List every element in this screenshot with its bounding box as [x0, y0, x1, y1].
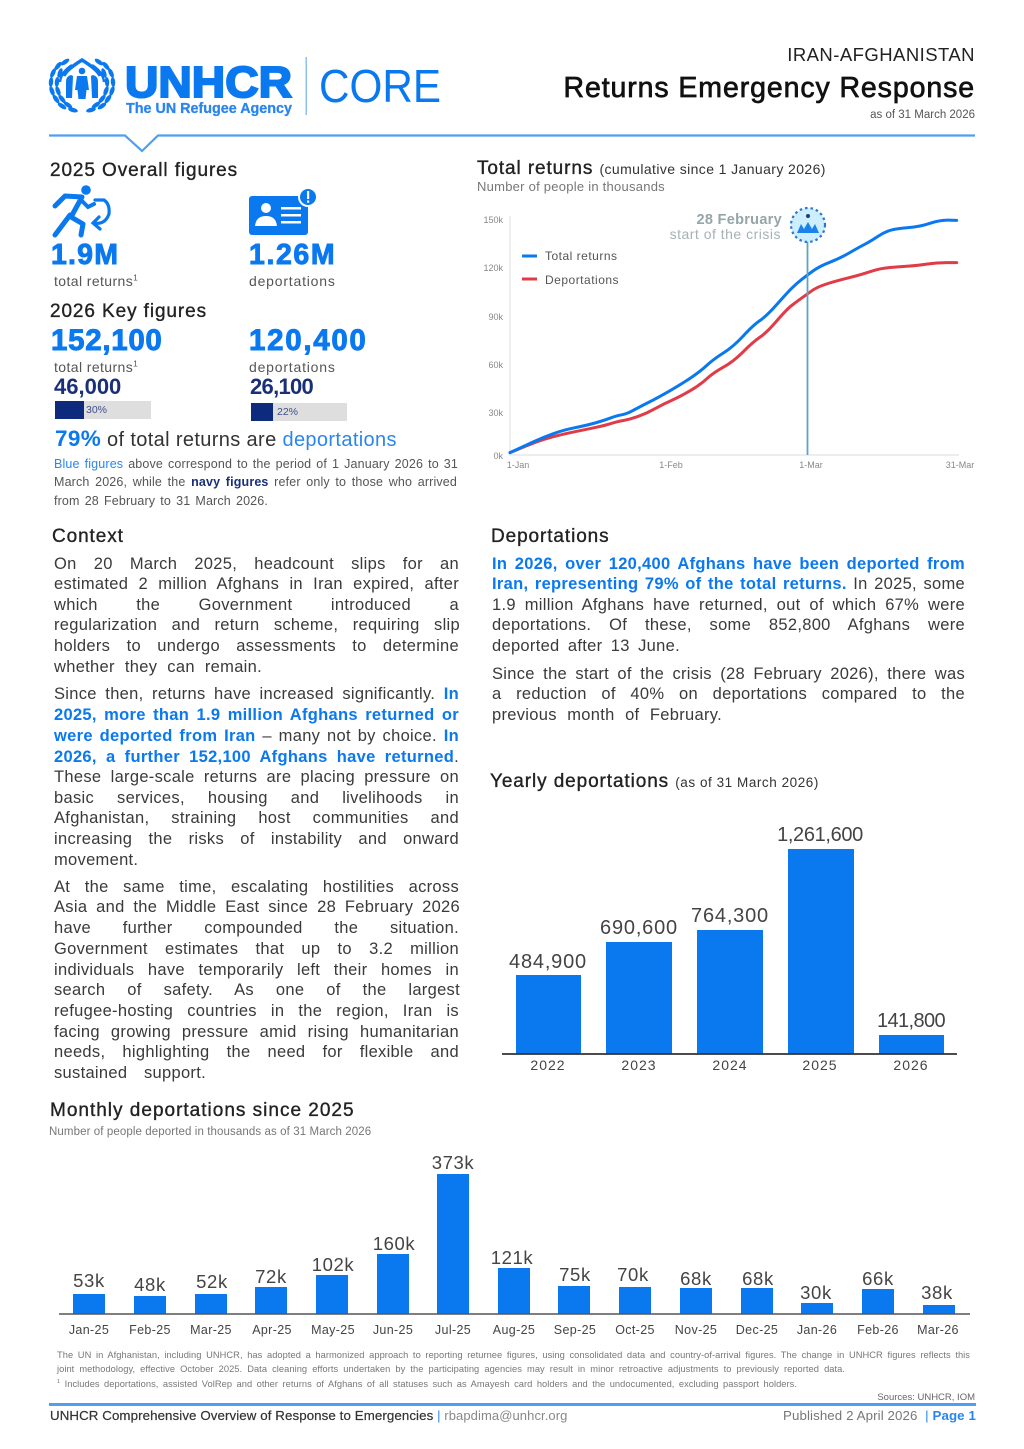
paragraph 3: search of safety. As one of the largest — [54, 981, 460, 999]
bar chart: Jan-25 — [69, 1323, 109, 1337]
bar chart: 160k — [373, 1233, 415, 1254]
line chart: 28 February — [696, 212, 782, 228]
text block: deportations — [491, 526, 965, 724]
header: title block — [563, 44, 975, 121]
heading: 2026 key figures: 2026 Key figures — [50, 301, 207, 322]
paragraph 3: needs, highlighting the need for flexible and — [54, 1043, 459, 1061]
heading: deportations: Deportations — [491, 526, 610, 547]
paragraph 1: holders to undergo assessments to determine — [54, 637, 459, 655]
paragraph 2: Since the start of the crisis (28 February 2026), there was — [492, 665, 965, 683]
chart: monthly deportations — [49, 1100, 970, 1337]
figure: 26,100: 26,100 — [250, 374, 313, 399]
footnotes: The UN in Afghanistan, including UNHCR, has adopted a harmonized approach to reporting returnee figures, using consolidated data and country-of-arrival figures. The change in UNHCR figures reflects this — [57, 1350, 970, 1360]
label: total returns: total returns1 — [54, 272, 138, 289]
logo: UNHCR CORE — [48, 57, 441, 117]
line chart: 1-Mar — [799, 460, 823, 470]
label: deportations 2026: deportations — [249, 359, 336, 375]
subheading: monthly unit: Number of people deported in thousands as of 31 March 2026 — [49, 1126, 371, 1138]
paragraph 2 — [492, 665, 965, 724]
header: region: IRAN-AFGHANISTAN — [787, 44, 975, 65]
paragraph 3 — [54, 878, 460, 1082]
footer: UNHCR Comprehensive Overview of Response to Emergencies | rbapdima@unhcr.org — [50, 1408, 568, 1423]
bar chart: Jan-26 — [797, 1323, 837, 1337]
paragraph 2: a reduction of 40% on deportations compared to the — [492, 685, 965, 703]
paragraph 2 — [54, 685, 459, 869]
bar chart: 30k — [800, 1282, 832, 1303]
paragraph 2: movement. — [54, 851, 138, 869]
bar chart: 690,600 — [600, 917, 678, 939]
note: figure colours: Blue figures above correspond to the period of 1 January 2026 to 31 — [54, 457, 458, 471]
label: total returns 2026: total returns1 — [54, 358, 138, 375]
line chart: 1-Feb — [659, 460, 683, 470]
footer: Published 2 April 2026 | Page 1 — [783, 1408, 976, 1423]
paragraph 2: 2026, a further 152,100 Afghans have returned. — [54, 748, 459, 766]
footnotes — [56, 1350, 970, 1389]
bar chart: 2023 — [621, 1057, 657, 1073]
logo: UNHCR CORE: UNHCR — [125, 58, 292, 107]
bar chart: 102k — [312, 1254, 354, 1275]
figure: 120,400: 120,400 — [249, 324, 368, 357]
bar chart: 1,261,600 — [777, 824, 863, 846]
bar chart: 2026 — [893, 1057, 929, 1073]
paragraph 2: increasing the risks of instability and onward — [54, 830, 459, 848]
figure: 152,100: 152,100 — [51, 324, 163, 357]
paragraph 2: were deported from Iran – many not by choice. In — [54, 727, 459, 745]
callout: 79% of total returns: 79% of total returns are deportations — [55, 426, 397, 451]
note: figure colours: March 2026, while the navy figures refer only to those who arrived — [54, 475, 457, 489]
paragraph 1: deported after 13 June. — [492, 637, 680, 655]
bar chart: 68k — [742, 1268, 774, 1289]
line chart: start of the crisis — [670, 226, 781, 242]
line chart: Total returns — [545, 249, 618, 263]
icon: returning person — [52, 185, 111, 238]
figure: 1.26M: 1.26M — [249, 239, 336, 271]
line chart: 90k — [488, 312, 503, 322]
paragraph 1: whether they can remain. — [54, 658, 262, 676]
panel: 2026 key figures — [50, 301, 458, 508]
bar chart: Jul-25 — [435, 1323, 471, 1337]
bar chart: Feb-26 — [857, 1323, 899, 1337]
subheading: number of people: Number of people in thousands — [477, 179, 665, 194]
figure: 1.9M: 1.9M — [51, 239, 119, 271]
line chart: 31-Mar — [946, 460, 974, 470]
label: deportations: deportations — [249, 273, 336, 289]
bar chart: May-25 — [311, 1323, 355, 1337]
heading: total returns: Total returns (cumulative since 1 January 2026) — [477, 158, 826, 179]
bar chart: Mar-26 — [917, 1323, 959, 1337]
bar chart: Aug-25 — [493, 1323, 535, 1337]
chart: yearly deportations — [490, 771, 957, 1073]
bar chart: 52k — [196, 1271, 228, 1292]
line chart: 30k — [488, 408, 503, 418]
line chart: 1-Jan — [507, 460, 529, 470]
note: figure colours — [54, 457, 458, 508]
progress bar: 22% — [251, 403, 347, 421]
paragraph 3: Government estimates that up to 3.2 million — [54, 940, 459, 958]
bar chart: Sep-25 — [554, 1323, 596, 1337]
heading: yearly deportations: Yearly deportations (as of 31 March 2026) — [490, 771, 819, 792]
paragraph 2: Since then, returns have increased significantly. In — [54, 685, 459, 703]
paragraph 1: deportations. Of these, some 852,800 Afghans were — [492, 616, 965, 634]
note: figure colours: from 28 February to 31 March 2026. — [54, 494, 268, 508]
bar chart: 68k — [680, 1268, 712, 1289]
bar chart: 141,800 — [877, 1010, 946, 1032]
bar chart: 373k — [432, 1152, 474, 1173]
bar chart: 764,300 — [691, 905, 769, 927]
header: date: as of 31 March 2026 — [870, 109, 975, 121]
bar chart: 2025 — [802, 1057, 838, 1073]
line chart: 60k — [488, 360, 503, 370]
text block: context — [52, 526, 460, 1082]
progress bar: 30%: 30% — [86, 404, 107, 416]
line chart: Deportations — [545, 273, 619, 287]
paragraph 2: previous month of February. — [492, 706, 722, 724]
bar chart: 66k — [862, 1268, 894, 1289]
paragraph 1: Iran, representing 79% of the total returns. In 2025, some — [492, 575, 965, 593]
line chart: 0k — [493, 451, 503, 461]
icon: id card alert — [249, 189, 316, 235]
paragraph 3: Asia and the Middle East since 28 February 2026 — [54, 898, 460, 916]
chart: total returns cumulative line chart — [477, 158, 974, 470]
bar chart: 121k — [491, 1247, 533, 1268]
bar chart: Feb-25 — [129, 1323, 171, 1337]
bar chart: Oct-25 — [615, 1323, 655, 1337]
header rule with chevron — [49, 134, 975, 152]
progress bar: 22%: 22% — [277, 406, 298, 418]
bar chart: 2024 — [712, 1057, 748, 1073]
heading: monthly deportations: Monthly deportations since 2025 — [50, 1100, 355, 1121]
paragraph 3: sustained support. — [54, 1064, 206, 1082]
paragraph 3: have further compounded the situation. — [54, 919, 459, 937]
paragraph 3: At the same time, escalating hostilities across — [54, 878, 459, 896]
panel: 2025 overall figures — [50, 160, 336, 289]
logo: UNHCR CORE: The UN Refugee Agency — [126, 100, 293, 117]
figure: 46,000: 46,000 — [54, 374, 121, 399]
bar chart: Nov-25 — [675, 1323, 717, 1337]
bar chart: 38k — [921, 1282, 953, 1303]
sources: Sources: UNHCR, IOM — [877, 1392, 975, 1403]
heading: 2025 overall figures: 2025 Overall figures — [50, 160, 238, 181]
bar chart: 72k — [255, 1266, 287, 1287]
bar chart: 70k — [617, 1264, 649, 1285]
line chart: 150k — [483, 215, 503, 225]
paragraph 1 — [492, 555, 965, 655]
heading: context: Context — [52, 526, 124, 547]
paragraph 3: refugee-hosting countries in the region, Iran is — [54, 1002, 459, 1020]
bar chart: 2022 — [530, 1057, 566, 1073]
line chart: 120k — [483, 263, 503, 273]
bar chart: 484,900 — [509, 951, 587, 973]
paragraph 3: individuals have temporarily left their homes in — [54, 961, 459, 979]
bar chart: Apr-25 — [252, 1323, 292, 1337]
paragraph 2: These large-scale returns are placing pressure on — [54, 768, 459, 786]
bar chart: Dec-25 — [736, 1323, 778, 1337]
paragraph 1: regularization and return scheme, requiring slip — [54, 616, 460, 634]
footnotes: 1 Includes deportations, assisted VolRep and other returns of Afghans of all statuses such as Amayesh card holders and the undocumented, excluding passport holders. — [57, 1379, 797, 1389]
paragraph 2: Afghanistan, straining host communities and — [54, 809, 459, 827]
paragraph 1: which the Government introduced a — [54, 596, 459, 614]
paragraph 2: 2025, more than 1.9 million Afghans returned or — [54, 706, 459, 724]
bar chart: 53k — [73, 1270, 105, 1291]
footnotes: joint methodology, effective October 2025. Data cleaning efforts undertaken by the participating agencies may result in minor retroactive adjustments to previously reported data. — [57, 1364, 845, 1374]
progress bar: 30% — [55, 401, 151, 419]
bar chart: Mar-25 — [190, 1323, 232, 1337]
header: main title: Returns Emergency Response — [563, 72, 975, 104]
bar chart: 48k — [134, 1274, 166, 1295]
paragraph 1: estimated 2 million Afghans in Iran expired, after — [54, 575, 459, 593]
footer — [49, 1403, 976, 1423]
paragraph 1: 1.9 million Afghans have returned, out of which 67% were — [492, 596, 965, 614]
logo: UNHCR CORE: CORE — [319, 60, 441, 112]
paragraph 1 — [54, 555, 460, 676]
paragraph 1: On 20 March 2025, headcount slips for an — [54, 555, 459, 573]
paragraph 3: facing growing pressure amid rising humanitarian — [54, 1023, 459, 1041]
bar chart: 75k — [559, 1264, 591, 1285]
bar chart: Jun-25 — [373, 1323, 413, 1337]
paragraph 1: In 2026, over 120,400 Afghans have been deported from — [492, 555, 965, 573]
paragraph 2: basic services, housing and livelihoods in — [54, 789, 459, 807]
